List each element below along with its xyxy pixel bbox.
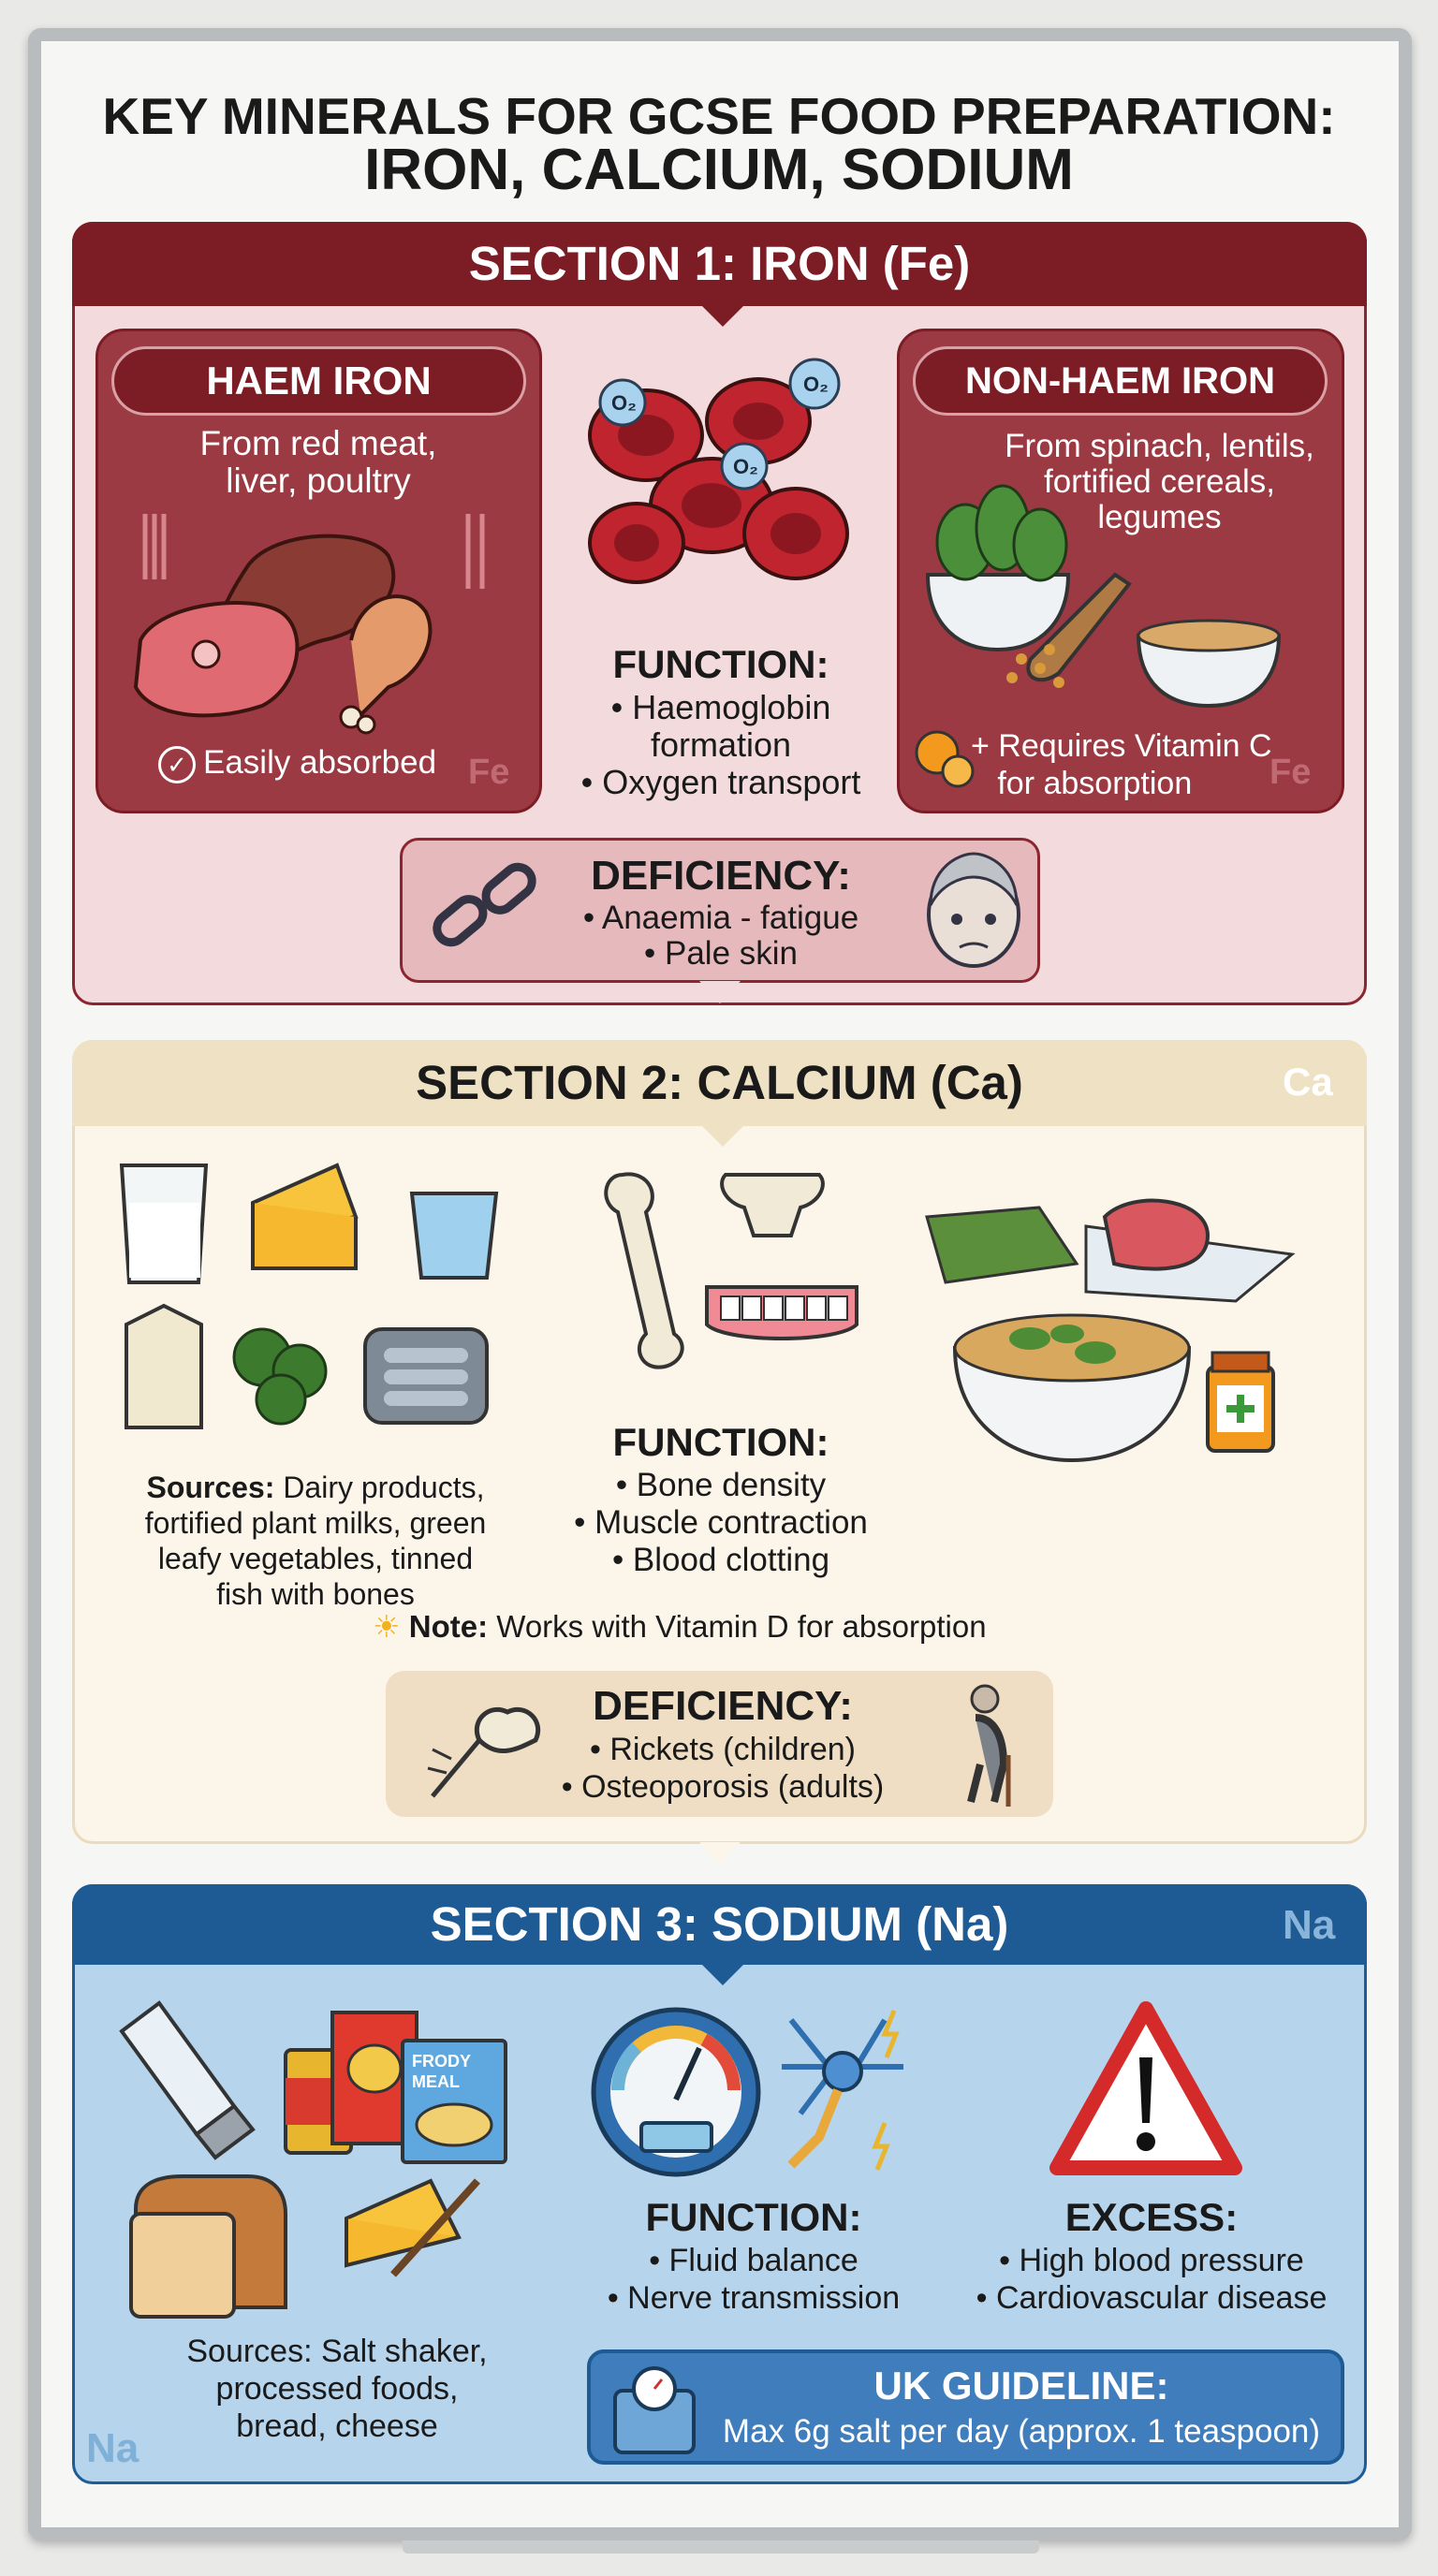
- text: vitamin d note: ☀ Note: Works with Vitamin D for absorption: [373, 1609, 987, 1644]
- text: iron deficiency: • Pale skin: [644, 935, 798, 972]
- panel: section 3 sodium: Na: [1283, 1902, 1335, 1948]
- text: non-haem sources: From spinach, lentils,: [1005, 428, 1314, 464]
- icon: broken chain: [433, 863, 536, 947]
- panel: non-haem iron: Fe: [1269, 753, 1311, 792]
- text: iron deficiency: • Anaemia - fatigue: [583, 900, 858, 936]
- text: calcium sources: fish with bones: [216, 1577, 415, 1611]
- text: iron deficiency: [583, 853, 858, 972]
- panel: haem iron: Fe: [468, 753, 509, 792]
- text: sodium sources: Sources: Salt shaker,: [186, 2334, 488, 2369]
- text: calcium deficiency: • Rickets (children): [590, 1732, 856, 1767]
- text: sodium function: FUNCTION:: [646, 2195, 861, 2239]
- panel: section 2 calcium: Ca: [1283, 1060, 1333, 1104]
- icon: gauge: [592, 2007, 760, 2177]
- icon: red blood cells: O₂: [611, 391, 637, 415]
- callout: uk guideline: [587, 2349, 1344, 2465]
- callout: iron deficiency: [400, 838, 1040, 983]
- text: non-haem sources: fortified cereals,: [1044, 463, 1275, 500]
- icon: salty foods: FRODY: [412, 2052, 471, 2071]
- icon: broken bone: [427, 1707, 541, 1798]
- icon: meat liver chicken: [134, 514, 485, 734]
- icon: tired face: [927, 852, 1020, 968]
- text: non-haem sources: legumes: [1097, 499, 1222, 535]
- icon: calcium foods: [120, 1163, 498, 1429]
- text: iron function: • Oxygen transport: [581, 763, 860, 801]
- text: uk guideline: Max 6g salt per day (approx. 1 teaspoon): [723, 2413, 1320, 2450]
- icon: red blood cells: O₂: [803, 373, 829, 396]
- text: vitamin c note: + Requires Vitamin C: [971, 728, 1272, 764]
- text: iron deficiency: DEFICIENCY:: [591, 853, 851, 899]
- icon: warning triangle: [1049, 2001, 1242, 2175]
- text: iron function: FUNCTION:: [613, 642, 829, 686]
- panel: section 3 sodium: [72, 1884, 1367, 2484]
- text: iron function: formation: [651, 725, 791, 764]
- text: easily absorbed: Easily absorbed: [203, 744, 436, 781]
- panel: section 3 sodium: Na: [86, 2425, 139, 2471]
- text: easily absorbed: ✓: [167, 751, 187, 779]
- icon: elderly person: [967, 1685, 1011, 1807]
- text: calcium function: • Bone density: [616, 1467, 826, 1503]
- text: calcium deficiency: • Osteoporosis (adults): [562, 1769, 884, 1805]
- text: haem sources: From red meat,: [200, 424, 436, 462]
- panel: non-haem iron: [897, 329, 1344, 813]
- text: calcium function: FUNCTION:: [613, 1420, 829, 1464]
- text: calcium function: [574, 1420, 868, 1578]
- text: haem sources: [200, 424, 436, 500]
- heading: section 3: SECTION 3: SODIUM (Na): [431, 1897, 1008, 1951]
- text: sodium function: • Nerve transmission: [608, 2280, 900, 2316]
- heading: section 2: SECTION 2: CALCIUM (Ca): [416, 1056, 1023, 1109]
- icon: red blood cells: O₂: [733, 455, 758, 478]
- heading: section 1: [72, 222, 1367, 306]
- text: iron function: • Haemoglobin: [611, 688, 830, 726]
- heading: haem iron: [111, 346, 526, 416]
- icon: salty foods: [119, 2000, 507, 2319]
- heading: non-haem iron: NON-HAEM IRON: [965, 360, 1275, 402]
- text: vitamin c note: [971, 728, 1272, 801]
- icon: neuron: [782, 2010, 903, 2171]
- heading: haem iron: HAEM IRON: [206, 359, 432, 402]
- text: sodium sources: [186, 2334, 488, 2444]
- tray: [403, 2540, 1039, 2554]
- text: calcium sources: [145, 1471, 486, 1611]
- text: sodium sources: processed foods,: [216, 2371, 458, 2407]
- icon: scale: [613, 2366, 696, 2454]
- text: calcium function: • Muscle contraction: [574, 1504, 868, 1541]
- text: sodium excess: • High blood pressure: [999, 2243, 1304, 2278]
- text: sodium function: • Fluid balance: [649, 2243, 858, 2278]
- icon: bone and teeth: [604, 1172, 858, 1369]
- text: sodium excess: EXCESS:: [1065, 2195, 1238, 2239]
- text: iron function: [581, 642, 861, 801]
- text: haem sources: liver, poultry: [226, 461, 411, 500]
- text: calcium function: • Blood clotting: [612, 1542, 829, 1578]
- text: sodium sources: bread, cheese: [236, 2408, 438, 2444]
- icon: salmon spinach bowl: [925, 1198, 1296, 1462]
- heading: non-haem iron: [913, 346, 1328, 416]
- text: sodium function: [608, 2195, 900, 2316]
- panel: section 1 iron: [72, 222, 1367, 1005]
- icon: salty foods: MEAL: [412, 2072, 460, 2091]
- icon: red blood cells: [588, 358, 849, 584]
- callout: calcium deficiency: [386, 1671, 1053, 1817]
- text: non-haem sources: [1005, 428, 1314, 535]
- title: IRON, CALCIUM, SODIUM: [364, 138, 1074, 202]
- heading: section 2: [72, 1040, 1367, 1126]
- title: [102, 87, 1336, 202]
- text: uk guideline: UK GUIDELINE:: [874, 2364, 1168, 2408]
- text: uk guideline: [723, 2364, 1320, 2450]
- heading: section 3: [72, 1884, 1367, 1965]
- panel: section 2 calcium: [72, 1040, 1367, 1844]
- text: calcium deficiency: DEFICIENCY:: [593, 1683, 853, 1729]
- text: calcium sources: Sources: Dairy products,: [146, 1471, 485, 1504]
- text: sodium excess: • Cardiovascular disease: [976, 2280, 1327, 2316]
- text: calcium deficiency: [562, 1683, 884, 1805]
- heading: section 1: SECTION 1: IRON (Fe): [469, 237, 970, 290]
- icon: spinach lentils cereal: [916, 485, 1281, 788]
- text: calcium sources: leafy vegetables, tinned: [158, 1542, 473, 1575]
- panel: haem iron: [95, 329, 542, 813]
- text: vitamin c note: for absorption: [997, 766, 1192, 801]
- text: calcium sources: fortified plant milks, green: [145, 1506, 486, 1540]
- title: KEY MINERALS FOR GCSE FOOD PREPARATION:: [102, 87, 1336, 145]
- text: sodium excess: [976, 2195, 1327, 2316]
